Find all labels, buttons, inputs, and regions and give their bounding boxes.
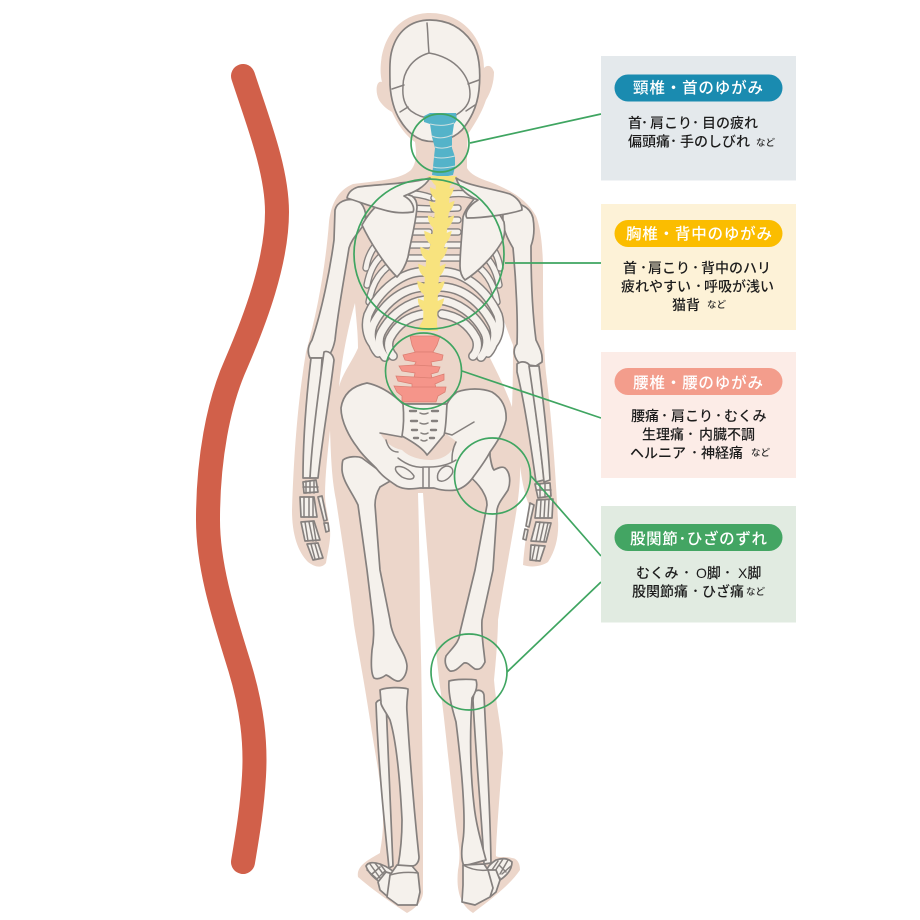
text: thoracic symptoms <box>621 260 774 313</box>
text: thoracic symptoms: ･ <box>692 260 699 276</box>
text: thoracic symptoms: 首 <box>623 260 637 276</box>
heading: thoracic: 胸椎・背中のゆがみ <box>626 224 772 243</box>
foot left <box>366 863 420 905</box>
pill: hip heading <box>614 524 782 551</box>
text: hip symptoms <box>632 565 766 600</box>
text: lumbar symptoms: ヘルニア <box>630 445 686 461</box>
text: lumbar symptoms: ･ <box>691 445 698 461</box>
femurs <box>342 450 510 681</box>
text: cervical symptoms <box>628 115 776 150</box>
text: lumbar symptoms: ･ <box>715 408 722 424</box>
text: cervical symptoms: ･ <box>692 115 699 131</box>
pill: lumbar heading <box>614 368 782 395</box>
text: hip symptoms: ･ <box>683 565 690 581</box>
text: thoracic symptoms: 呼吸が浅い <box>704 278 774 294</box>
text: hip symptoms: 股関節痛 <box>632 584 688 600</box>
pill: thoracic heading <box>614 220 782 247</box>
text: thoracic symptoms: ･ <box>695 278 702 294</box>
text: lumbar symptoms: 生理痛 <box>642 426 684 442</box>
text: cervical symptoms: 肩こり <box>650 115 692 131</box>
text: hip symptoms: ･ <box>692 584 699 600</box>
text: thoracic symptoms: など <box>707 300 726 311</box>
text: lumbar symptoms: など <box>751 448 770 459</box>
heading: cervical: 頸椎・首のゆがみ <box>633 78 763 97</box>
text: thoracic symptoms: ･ <box>640 260 647 276</box>
body silhouette <box>292 13 558 913</box>
text: lumbar symptoms: 肩こり <box>671 408 713 424</box>
text: thoracic symptoms: 肩こり <box>648 260 690 276</box>
panel: hip and knee <box>601 506 796 622</box>
spine curve <box>208 76 277 862</box>
text: cervical symptoms: 手のしびれ <box>680 134 750 150</box>
text: cervical symptoms: ･ <box>641 115 648 131</box>
heading: hip: 股関節･ひざのずれ <box>630 529 767 548</box>
heading: lumbar: 腰椎・腰のゆがみ <box>633 373 763 392</box>
lumbar vertebrae <box>394 336 446 402</box>
scapulae and clavicles <box>347 178 522 280</box>
text: thoracic symptoms: 疲れやすい <box>621 278 691 294</box>
text: lumbar symptoms: 神経痛 <box>701 445 743 461</box>
text: lumbar symptoms: ･ <box>687 426 694 442</box>
text: hip symptoms: O脚 <box>696 565 721 581</box>
text: hip symptoms: など <box>746 587 766 598</box>
lower legs left <box>376 688 419 868</box>
foot right <box>462 859 512 905</box>
text: cervical symptoms: 目の疲れ <box>702 115 758 131</box>
text: lumbar symptoms: ･ <box>661 408 668 424</box>
text: cervical symptoms: 偏頭痛 <box>628 134 670 150</box>
text: lumbar symptoms <box>630 408 770 461</box>
thoracic vertebrae <box>417 176 457 331</box>
callout circles and leader lines <box>354 114 601 710</box>
text: hip symptoms: ひざ痛 <box>702 584 744 600</box>
text: hip symptoms: X脚 <box>738 565 761 581</box>
pill: cervical heading <box>614 74 782 102</box>
text: lumbar symptoms: 内臓不調 <box>699 426 755 442</box>
cervical vertebrae <box>424 113 457 177</box>
text: hip symptoms: むくみ <box>636 565 679 581</box>
humeri <box>308 199 542 366</box>
sacrum <box>402 404 447 455</box>
skull <box>390 20 480 142</box>
lower legs right <box>449 679 491 866</box>
text: hip symptoms: ･ <box>724 565 731 581</box>
panel: lumbar <box>601 352 796 478</box>
text: thoracic symptoms: 背中のハリ <box>701 260 771 276</box>
text: cervical symptoms: など <box>756 138 776 149</box>
arm gaps <box>339 303 513 407</box>
text: cervical symptoms: ･ <box>670 134 677 150</box>
panel: cervical <box>601 56 796 180</box>
forearm and hand left <box>300 351 334 560</box>
text: thoracic symptoms: 猫背 <box>672 297 700 313</box>
text: cervical symptoms: 首 <box>628 115 642 131</box>
panel: thoracic <box>601 204 796 330</box>
text: lumbar symptoms: 腰痛 <box>631 408 659 424</box>
pelvis <box>341 383 506 490</box>
ribcage <box>366 194 500 357</box>
forearm and hand right <box>517 362 553 561</box>
text: lumbar symptoms: むくみ <box>724 408 767 424</box>
